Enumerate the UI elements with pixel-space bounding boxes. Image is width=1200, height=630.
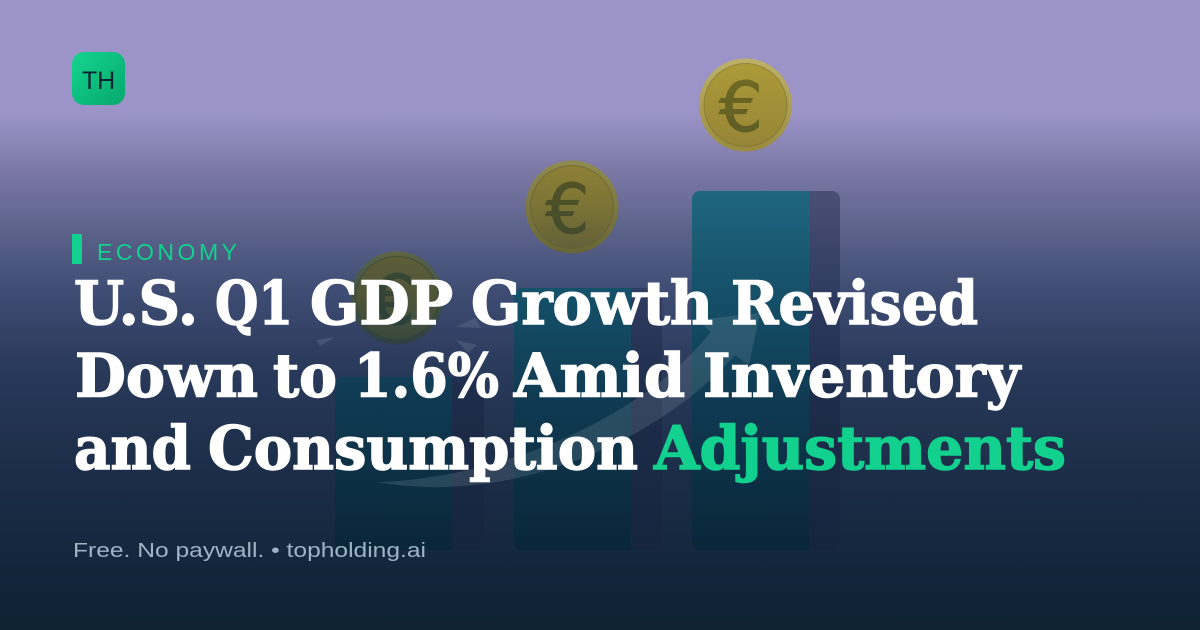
title: Down (75, 342, 258, 412)
coin: middle (526, 160, 618, 254)
title: and (74, 414, 191, 484)
bar chart (335, 191, 840, 550)
title: Amid (513, 342, 685, 412)
bar: tall (692, 191, 840, 550)
title: Growth (471, 269, 713, 339)
title (74, 269, 1066, 484)
logo badge (72, 52, 125, 105)
euro sign: € (719, 68, 763, 148)
logo badge: TH (82, 67, 115, 95)
category tag: ECONOMY (97, 239, 237, 265)
coin: top (699, 58, 792, 152)
bar: short (335, 377, 484, 550)
euro sign: € (546, 170, 589, 250)
title: GDP (310, 269, 453, 339)
euro sign: € (371, 261, 415, 341)
title: to (273, 342, 337, 412)
title: Q1 (215, 269, 293, 339)
title: Consumption (208, 414, 638, 484)
title: Adjustments (653, 414, 1066, 484)
footer text: Free. No paywall. • topholding.ai (73, 539, 426, 562)
arrow: rising trend (316, 313, 760, 487)
title: U.S. (74, 269, 198, 339)
title: 1.6% (354, 342, 499, 412)
coin: low (350, 252, 444, 344)
title: Revised (731, 269, 978, 339)
bar: medium (514, 288, 662, 550)
title: Inventory (703, 342, 1022, 412)
